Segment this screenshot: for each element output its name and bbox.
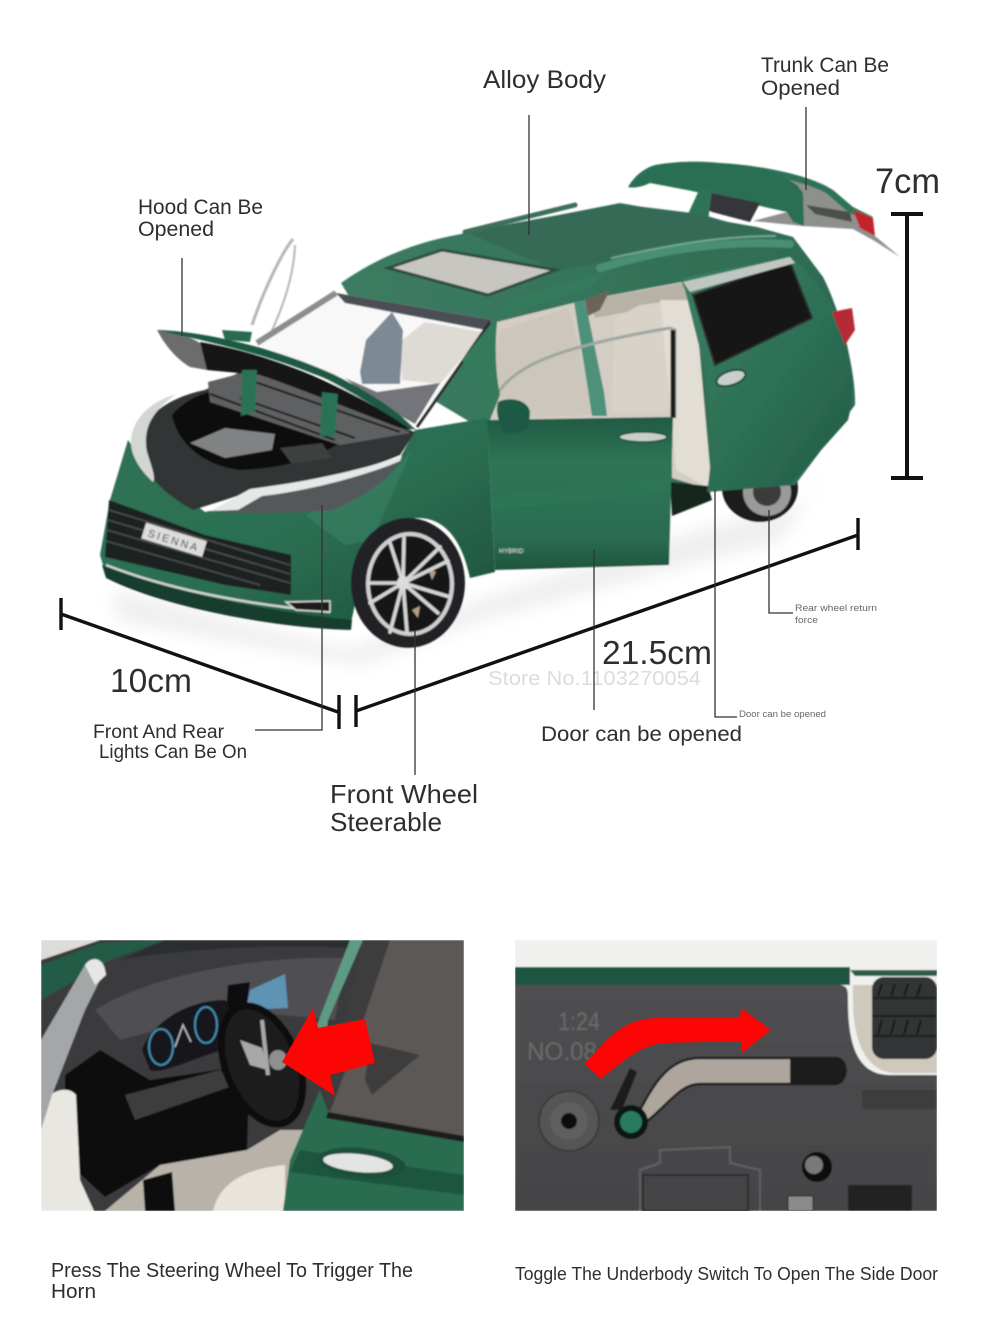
steering wheel xyxy=(218,1002,307,1128)
left chrome edge xyxy=(131,394,176,482)
red arrow pointing to steering wheel xyxy=(282,1008,375,1096)
height dimension bracket xyxy=(891,214,923,478)
heading label: hood second line: Opened xyxy=(138,218,214,241)
red curved arrow xyxy=(585,1008,771,1079)
side window xyxy=(327,940,464,1136)
roof panel xyxy=(465,204,770,270)
tailgate outer panel xyxy=(628,162,804,226)
screw boss xyxy=(539,1091,599,1151)
callout line: rear wheel xyxy=(769,510,793,613)
heading label: trunk second line: Opened xyxy=(761,77,840,100)
front door opening interior xyxy=(487,282,712,490)
small label: rear wheel: Rear wheel return xyxy=(795,603,877,614)
hood outer rim xyxy=(157,330,416,430)
tail light on tailgate xyxy=(853,210,875,236)
height dimension label: 7cm xyxy=(875,162,940,201)
clear door glass xyxy=(41,959,105,1130)
sunroof xyxy=(388,250,556,295)
windshield with interior xyxy=(257,293,493,428)
rocker step xyxy=(670,482,712,516)
front seat, blue gray xyxy=(360,312,403,384)
label: lights: Front And Rear xyxy=(93,722,225,743)
width dimension label: 10cm xyxy=(110,662,192,699)
label: front wheel second line: Steerable xyxy=(330,807,442,837)
instrument cluster xyxy=(142,1000,229,1071)
screw xyxy=(802,1152,832,1182)
white seat xyxy=(41,1090,94,1211)
callout line: lights xyxy=(255,505,322,730)
engine bay xyxy=(131,368,415,510)
callout line: front wheel xyxy=(414,630,416,775)
beige floor and seat xyxy=(105,1130,310,1211)
tailgate glass xyxy=(753,176,900,257)
width dimension arrow xyxy=(61,598,339,729)
far-side open door glass xyxy=(252,239,295,335)
switch slot xyxy=(636,1058,846,1122)
panel: underbody switch photo xyxy=(515,940,937,1211)
badge: Sienna: SIENNA xyxy=(146,528,201,555)
hood underside glass xyxy=(157,330,210,370)
length dimension label: 21.5cm xyxy=(602,634,712,671)
small label: sliding door: Door can be opened xyxy=(739,709,826,719)
firewall with radiators xyxy=(208,368,410,445)
metal plate xyxy=(515,985,937,1211)
brake glints xyxy=(412,568,436,618)
lower bumper shade xyxy=(102,565,352,630)
door handle xyxy=(322,1147,406,1174)
caption: steering wheel second line: Horn xyxy=(51,1281,96,1303)
rear tail light xyxy=(832,308,855,345)
sliding door handle xyxy=(715,367,747,389)
dash xyxy=(345,378,440,424)
embossed text: 1:24 xyxy=(558,1008,600,1036)
callout line: hood xyxy=(181,258,183,336)
caption: underbody switch: Toggle The Underbody Switch To Open The Side Door xyxy=(515,1264,938,1284)
front body xyxy=(100,418,495,623)
callout line: trunk xyxy=(805,107,807,190)
toggle switch xyxy=(610,1068,637,1110)
rear side window xyxy=(693,262,812,365)
dark block xyxy=(848,1185,912,1211)
label: front wheel: Front Wheel xyxy=(330,779,478,809)
panel: steering wheel photo xyxy=(41,940,464,1211)
body rear and roof shell xyxy=(341,203,855,492)
heading label: hood: Hood Can Be xyxy=(138,196,263,219)
front grille xyxy=(105,500,330,612)
panel: car photo xyxy=(100,162,900,665)
callout line: sliding door xyxy=(715,490,737,717)
under-hood black band xyxy=(200,342,412,430)
length dimension arrow xyxy=(356,518,858,727)
callout line: alloy body xyxy=(528,115,530,235)
hinge xyxy=(698,191,760,222)
front wheel xyxy=(351,518,465,648)
side mirror xyxy=(497,399,530,434)
door window frame xyxy=(492,328,675,418)
door pillar xyxy=(316,940,364,1028)
body crease highlight xyxy=(305,450,412,545)
roof rails xyxy=(465,205,790,268)
store watermark: Store No.1103270054 xyxy=(488,668,701,690)
small label: rear wheel second line: force xyxy=(795,615,818,626)
heading label: alloy body: Alloy Body xyxy=(483,66,607,94)
green body strip xyxy=(515,967,850,985)
embossed model number: NO.08 xyxy=(527,1038,597,1066)
label: lights second line: Lights Can Be On xyxy=(99,742,247,763)
label: door: Door can be opened xyxy=(541,723,742,746)
heading label: trunk: Trunk Can Be xyxy=(761,54,889,77)
gauges xyxy=(149,1007,217,1065)
rear sliding door xyxy=(682,256,855,492)
engine block xyxy=(190,428,275,458)
lower dash xyxy=(65,1050,250,1197)
engine bay black xyxy=(172,392,345,470)
wheel well xyxy=(853,985,937,1073)
headlight with chrome bar xyxy=(210,456,402,513)
screen xyxy=(246,974,288,1010)
door panel xyxy=(283,1090,464,1211)
badge: Sienna xyxy=(141,522,207,557)
tailgate upper spine xyxy=(720,163,873,222)
top edge with green cowl xyxy=(41,940,165,1000)
battery cover xyxy=(640,1147,760,1211)
rear wheel xyxy=(722,454,798,522)
small notches xyxy=(862,1090,937,1109)
open hood xyxy=(157,330,416,436)
door handle xyxy=(619,432,667,442)
open front door xyxy=(487,399,673,570)
B pillar xyxy=(574,300,607,416)
A pillar green xyxy=(462,270,610,420)
callout line: door xyxy=(593,550,595,710)
front seat, white xyxy=(400,322,484,384)
caption: steering wheel: Press The Steering Wheel To Trigger The xyxy=(51,1260,413,1282)
door badge: HYBRID xyxy=(499,548,524,555)
black fascia arch xyxy=(133,372,415,510)
chrome lip xyxy=(106,565,330,612)
tire xyxy=(872,977,937,1059)
floor shadow xyxy=(110,470,830,665)
tailgate open xyxy=(628,162,900,257)
